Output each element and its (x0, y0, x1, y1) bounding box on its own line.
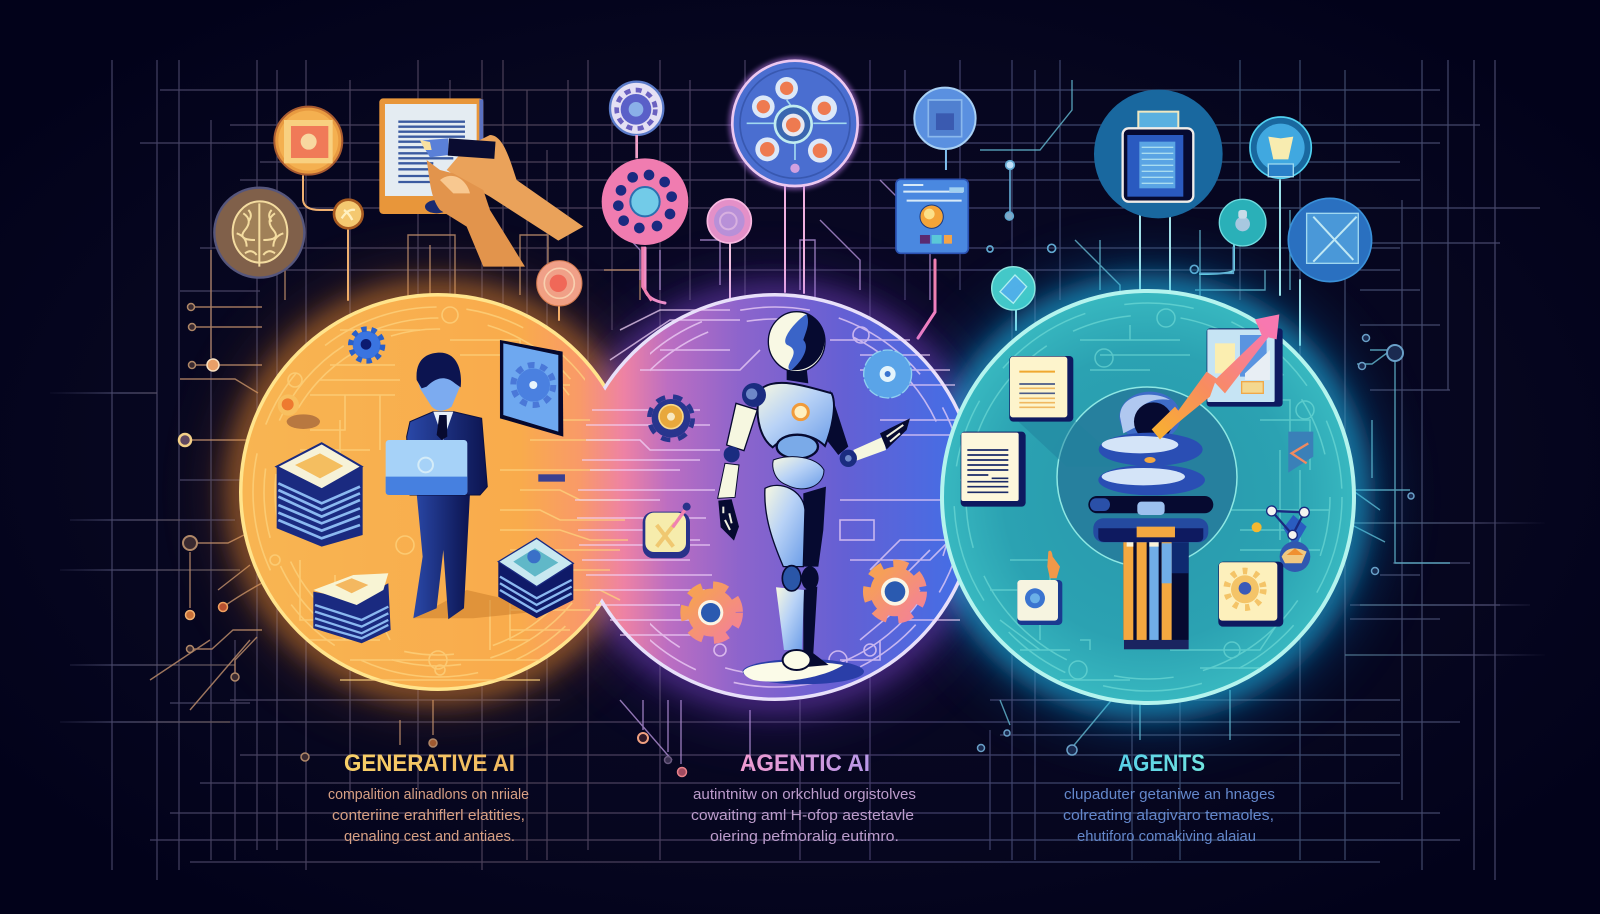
circle glows (240, 291, 1354, 703)
icon: blue gear disc (864, 350, 912, 398)
robot torso (827, 390, 848, 455)
robot head (787, 368, 808, 383)
description: clupaduter getaniwe an hnages (1064, 786, 1275, 803)
icon: doc left (961, 432, 1026, 507)
description: cowaiting aml H-ofop aestetavle (691, 807, 914, 824)
icon: tall stack (277, 443, 363, 547)
person shadow (413, 590, 553, 618)
ambient glows behind the circles (223, 271, 1376, 723)
stems linking icons to circles (303, 176, 1300, 345)
circuit traces: agents (954, 303, 1342, 691)
panel: generative and agentic merged circles (241, 295, 977, 699)
description (1063, 786, 1275, 845)
icons inside agentic circle (643, 350, 923, 640)
icons inside generative circle (277, 329, 573, 643)
node dots (179, 304, 1414, 776)
icon: low stack (313, 573, 391, 643)
icon: network wheel medallion (728, 57, 862, 190)
icon: blueprint medallion (1288, 198, 1372, 282)
description: colreating alagivaro temaoles, (1063, 807, 1274, 824)
robot base (743, 659, 864, 684)
label: agents (1063, 750, 1275, 845)
panel: agents circle (942, 291, 1354, 703)
icon: brain medallion (214, 188, 304, 278)
icon: tablet with document (379, 98, 483, 214)
panel: agentic AI icons above circle (602, 57, 976, 301)
laptop (386, 440, 467, 495)
icon: blue gear (351, 329, 383, 361)
icon: chart doc (1207, 328, 1283, 407)
description: oiering pefmoralig eutimro. (710, 828, 899, 845)
circuit traces: generative AI (253, 307, 628, 680)
robot left arm (727, 403, 757, 451)
heading: AGENTIC AI (740, 750, 870, 777)
panel: generative AI icons above circle (214, 98, 583, 306)
icon: lower right orange gear (867, 564, 923, 620)
figure: person with laptop (386, 353, 553, 619)
torso (407, 412, 487, 495)
icon: gear tile (1218, 562, 1283, 627)
description: conteriine erahiflerl elatities, (332, 807, 525, 824)
legs (413, 493, 470, 619)
robot right arm (853, 437, 886, 461)
icon: dashboard panel (896, 179, 968, 300)
icon: small teal medallion (1219, 199, 1266, 246)
circuit traces: agentic AI (575, 307, 965, 687)
icon: pink dial (602, 135, 688, 301)
description (328, 786, 529, 845)
icon: dark bar (538, 474, 565, 482)
icon: small gold coin (333, 198, 364, 230)
icon: cyan diamond medallion (992, 267, 1035, 310)
heading: GENERATIVE AI (344, 750, 515, 777)
description (691, 786, 916, 845)
heading: AGENTS (1118, 750, 1205, 777)
icon: bolt tile (1288, 432, 1313, 473)
icon: navy gear with ring (649, 397, 693, 440)
icon: doc shadowed (1009, 356, 1127, 467)
icon: orange dot (278, 394, 320, 429)
inner lens (1057, 387, 1237, 567)
icon: blue chip medallion (914, 88, 976, 170)
icon: lower left orange gear (684, 585, 739, 640)
icon: pale tile with pin (643, 503, 691, 558)
icon: small coral medallion (537, 261, 582, 306)
label: agentic AI (691, 750, 916, 845)
description: autintnitw on orkchlud orgistolves (693, 786, 916, 803)
icon: network cluster (1252, 506, 1310, 572)
description: qenaling cest and antiaes. (344, 828, 515, 845)
icon: lens tile with finger (1017, 551, 1062, 625)
icon: orange picture medallion (274, 107, 342, 175)
icons inside agents circle (961, 314, 1313, 649)
head (417, 353, 460, 411)
icon: gear poster (500, 340, 563, 437)
robot legs (803, 487, 829, 667)
icon: node dots (987, 161, 1233, 273)
icon: document card medallion (1094, 90, 1223, 218)
description: compalition alinadlons on nriiale (328, 786, 529, 803)
panel: agents icons above circle (987, 90, 1372, 310)
icon: flower medallion (610, 82, 663, 135)
icon: chair medallion (1250, 117, 1311, 178)
description: ehutiforo comakiving alaiau (1077, 828, 1256, 845)
icon: right stack (498, 538, 573, 618)
label: generative AI (328, 750, 529, 845)
warm and cool circuit traces (150, 80, 1450, 770)
icon: hand holding card (420, 135, 583, 267)
figure: robot (718, 312, 910, 684)
arrow: rising trend (1152, 314, 1279, 439)
icon: small pink medallion (707, 199, 751, 300)
figure: pillar (1088, 392, 1213, 649)
